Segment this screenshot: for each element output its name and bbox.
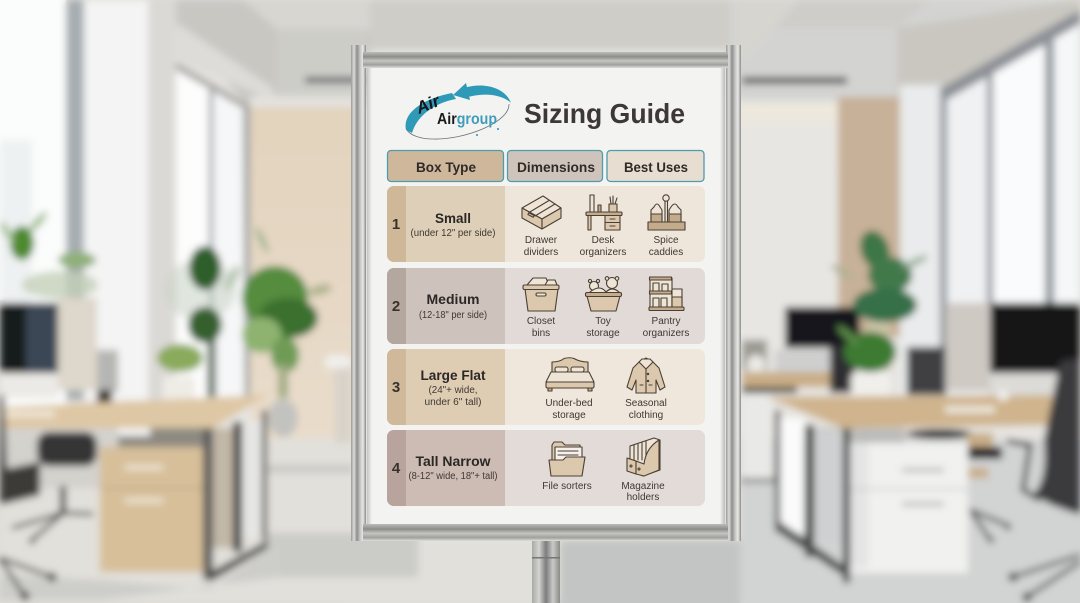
row 1: Small: Small [435, 210, 471, 226]
row 1: Small: organizers [580, 247, 626, 258]
header: Box Type [388, 150, 504, 182]
row 3: Large Flat: (24"+ wide, [428, 385, 478, 396]
header: Dimensions: Dimensions [517, 159, 595, 175]
left monitor [0, 303, 58, 373]
icon: spice caddies [648, 195, 685, 230]
row 3: Large Flat: under 6" tall) [424, 397, 482, 408]
row 3: Large Flat: 3 [392, 379, 400, 396]
icon: magazine holders [627, 438, 660, 476]
header: Best Uses: Best Uses [624, 159, 688, 175]
table header [388, 150, 704, 182]
row 3: Large Flat: storage [552, 410, 586, 421]
row 3: Large Flat: Seasonal [625, 398, 667, 409]
title: Sizing Guide [524, 98, 685, 129]
right chair [1033, 359, 1080, 515]
row 2: Medium: 2 [392, 298, 400, 315]
right wall [735, 105, 840, 355]
wood wall left [250, 107, 365, 442]
right cabinet [850, 443, 968, 573]
row 1: Small [387, 186, 705, 262]
row 2: Medium [387, 268, 705, 344]
row 4: Tall Narrow: File sorters [542, 481, 592, 492]
row 2: Medium: (12-18" per side) [419, 310, 487, 321]
logo: Airgroup: Airgroup [437, 111, 497, 128]
row 2: Medium: storage [586, 328, 620, 339]
sign panel [367, 68, 725, 524]
row 4: Tall Narrow: Magazine [621, 481, 665, 492]
logo: Airgroup: Air [412, 91, 444, 118]
icon: seasonal clothing coat [627, 358, 665, 393]
row 1: Small: Desk [592, 235, 615, 246]
left chair [0, 395, 8, 505]
icon: closet bins [523, 278, 559, 311]
header: Box Type: Box Type [416, 159, 476, 175]
row 3: Large Flat: Large Flat [420, 367, 486, 383]
row 4: Tall Narrow [387, 430, 705, 506]
left cabinet [100, 447, 203, 572]
icon: toy storage [586, 277, 622, 311]
right windows [946, 78, 987, 395]
sign stand pole [532, 534, 560, 603]
sign frame [351, 45, 741, 541]
row 1: Small: dividers [524, 247, 558, 258]
row 4: Tall Narrow: Tall Narrow [416, 453, 491, 469]
row 1: Small: 1 [392, 216, 400, 233]
row 2: Medium: organizers [643, 328, 689, 339]
ceiling right [730, 0, 1080, 100]
row 2: Medium: Medium [426, 291, 480, 307]
right back desk and monitors [785, 307, 860, 348]
row 1: Small: (under 12" per side) [410, 228, 496, 239]
icon: pantry organizers [649, 277, 684, 310]
row 1: Small: Drawer [525, 235, 558, 246]
icon: bed [546, 358, 594, 391]
left desk [3, 395, 267, 428]
row 4: Tall Narrow: 4 [392, 460, 401, 477]
row 3: Large Flat [387, 349, 705, 425]
icon: drawer dividers [522, 196, 561, 229]
row 4: Tall Narrow: holders [627, 492, 659, 503]
header: Best Uses [607, 150, 704, 182]
row 3: Large Flat: clothing [629, 410, 663, 421]
right desk [767, 395, 1052, 428]
icon: desk organizers [586, 195, 622, 230]
logo: Airgroup [406, 83, 511, 139]
floor [0, 438, 1080, 603]
ceiling behind sign [340, 0, 750, 50]
header: Dimensions [508, 150, 602, 182]
left windows [0, 0, 66, 420]
plants left [22, 271, 98, 299]
row 3: Large Flat: Under-bed [545, 398, 593, 409]
row 1: Small: caddies [649, 247, 683, 258]
row 4: Tall Narrow: (8-12" wide, 18"+ tall) [408, 471, 498, 482]
icon: file sorters [549, 442, 585, 476]
row 1: Small: Spice [653, 235, 679, 246]
row 2: Medium: Toy [595, 316, 611, 327]
ceiling left [148, 0, 370, 107]
row 2: Medium: Closet [527, 316, 555, 327]
row 2: Medium: Pantry [652, 316, 680, 327]
row 2: Medium: bins [532, 328, 550, 339]
